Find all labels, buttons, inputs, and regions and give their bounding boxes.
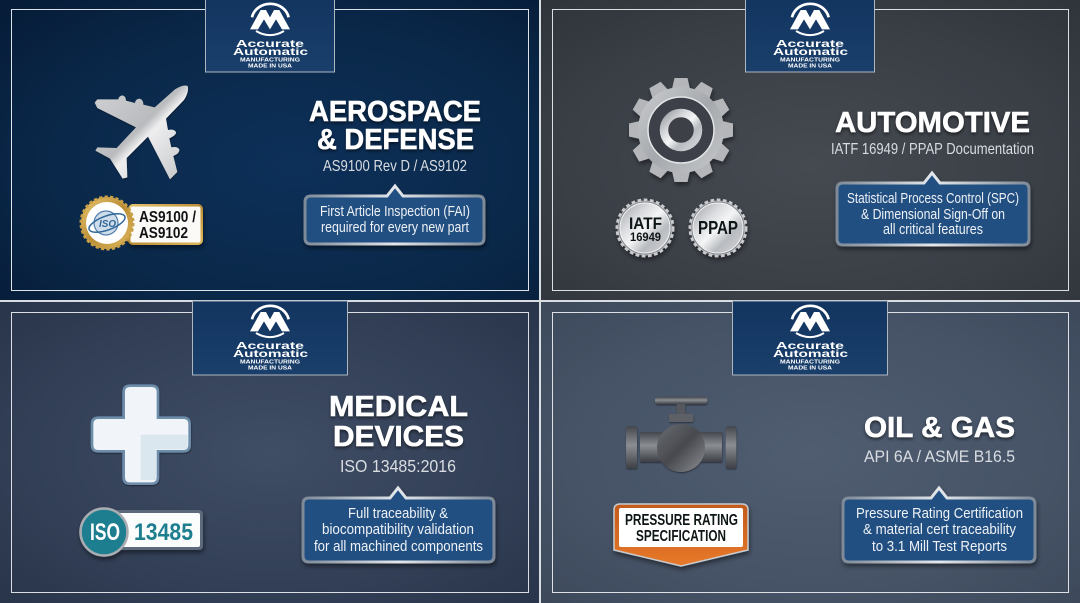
subheading: oil and gas standards: API 6A / ASME B16.5 <box>864 447 1015 466</box>
badge: ISO 13485: ISO <box>90 519 120 546</box>
logo tab: medical <box>192 301 348 375</box>
callout: traceability and biocompatibility <box>303 488 494 562</box>
badge: ISO 13485 <box>80 508 203 556</box>
heading: medical devices <box>329 391 468 453</box>
badge: AS9100 / AS9102: AS9100 / <box>139 209 197 226</box>
callout: traceability and biocompatibility: for all machined components <box>314 538 483 555</box>
heading: aerospace and defense <box>309 96 481 156</box>
badge: AS9100 / AS9102: ISO <box>99 219 116 230</box>
subheading: aerospace standards: AS9100 Rev D / AS9102 <box>323 158 467 175</box>
callout: statistical process control: Statistical Process Control (SPC) <box>847 190 1019 207</box>
subheading: medical standard: ISO 13485:2016 <box>340 456 456 476</box>
heading: automotive: AUTOMOTIVE <box>835 107 1030 139</box>
heading: aerospace and defense: AEROSPACE <box>309 96 481 128</box>
badge: pressure rating specification <box>614 504 748 566</box>
callout: statistical process control: & Dimensional Sign-Off on <box>861 206 1005 223</box>
icon: medical cross <box>92 386 190 484</box>
heading: medical devices: DEVICES <box>333 421 464 453</box>
badge: pressure rating specification: PRESSURE RATING <box>625 512 738 529</box>
icon: gear <box>629 78 733 182</box>
heading: oil and gas: OIL & GAS <box>864 412 1015 444</box>
logo tab: medical: Automatic <box>233 348 308 360</box>
badge: ISO 13485: 13485 <box>134 519 193 546</box>
panel: aerospace and defense <box>0 0 539 300</box>
logo tab: oil and gas <box>732 301 888 375</box>
logo tab: aerospace: Accurate <box>236 38 304 50</box>
logo tab: automotive <box>746 0 874 72</box>
badge: IATF 16949: IATF <box>629 214 662 233</box>
logo tab: oil and gas: MANUFACTURING <box>780 360 840 366</box>
logo tab: automotive: Accurate <box>776 38 844 50</box>
logo tab: aerospace <box>206 0 334 72</box>
logo tab: oil and gas: Accurate <box>776 340 844 352</box>
badge: PPAP <box>690 200 746 256</box>
logo tab: medical: MADE IN USA <box>248 366 292 372</box>
callout: statistical process control <box>837 173 1029 245</box>
logo tab: automotive: MANUFACTURING <box>780 58 840 64</box>
callout: pressure rating certification <box>843 488 1035 562</box>
badge: AS9100 / AS9102 <box>81 197 203 249</box>
badge: AS9100 / AS9102: AS9102 <box>139 225 188 242</box>
logo tab: automotive: MADE IN USA <box>788 64 832 70</box>
callout: pressure rating certification: & material cert traceability <box>863 521 1016 538</box>
logo tab: aerospace: MANUFACTURING <box>240 58 300 64</box>
logo tab: oil and gas: Automatic <box>773 348 848 360</box>
logo tab: medical: MANUFACTURING <box>240 360 300 366</box>
panel: automotive <box>541 0 1080 300</box>
icon: valve <box>626 397 736 472</box>
panel: medical devices <box>0 301 539 603</box>
panel: oil and gas <box>541 301 1080 603</box>
logo tab: automotive: Automatic <box>773 46 848 58</box>
heading: medical devices: MEDICAL <box>329 391 468 423</box>
heading: aerospace and defense: & DEFENSE <box>317 124 474 156</box>
callout: first article inspection: First Article Inspection (FAI) <box>320 203 470 220</box>
callout: statistical process control: all critical features <box>883 221 983 238</box>
callout: pressure rating certification: to 3.1 Mill Test Reports <box>872 538 1007 555</box>
callout: first article inspection: required for every new part <box>321 219 470 236</box>
badge: IATF 16949 <box>618 200 672 256</box>
badge: pressure rating specification: SPECIFICATION <box>636 528 726 545</box>
callout: first article inspection <box>305 186 484 244</box>
logo tab: oil and gas: MADE IN USA <box>788 366 832 372</box>
callout: traceability and biocompatibility: biocompatibility validation <box>322 521 474 538</box>
subheading: automotive standards: IATF 16949 / PPAP Documentation <box>831 141 1034 158</box>
callout: pressure rating certification: Pressure Rating Certification <box>856 505 1023 522</box>
logo tab: aerospace: Automatic <box>233 46 308 58</box>
logo tab: aerospace: MADE IN USA <box>248 64 292 70</box>
icon: airplane <box>95 85 188 179</box>
badge: PPAP: PPAP <box>698 218 738 238</box>
logo tab: medical: Accurate <box>236 340 304 352</box>
callout: traceability and biocompatibility: Full traceability & <box>348 505 448 522</box>
badge: IATF 16949: 16949 <box>630 230 661 244</box>
